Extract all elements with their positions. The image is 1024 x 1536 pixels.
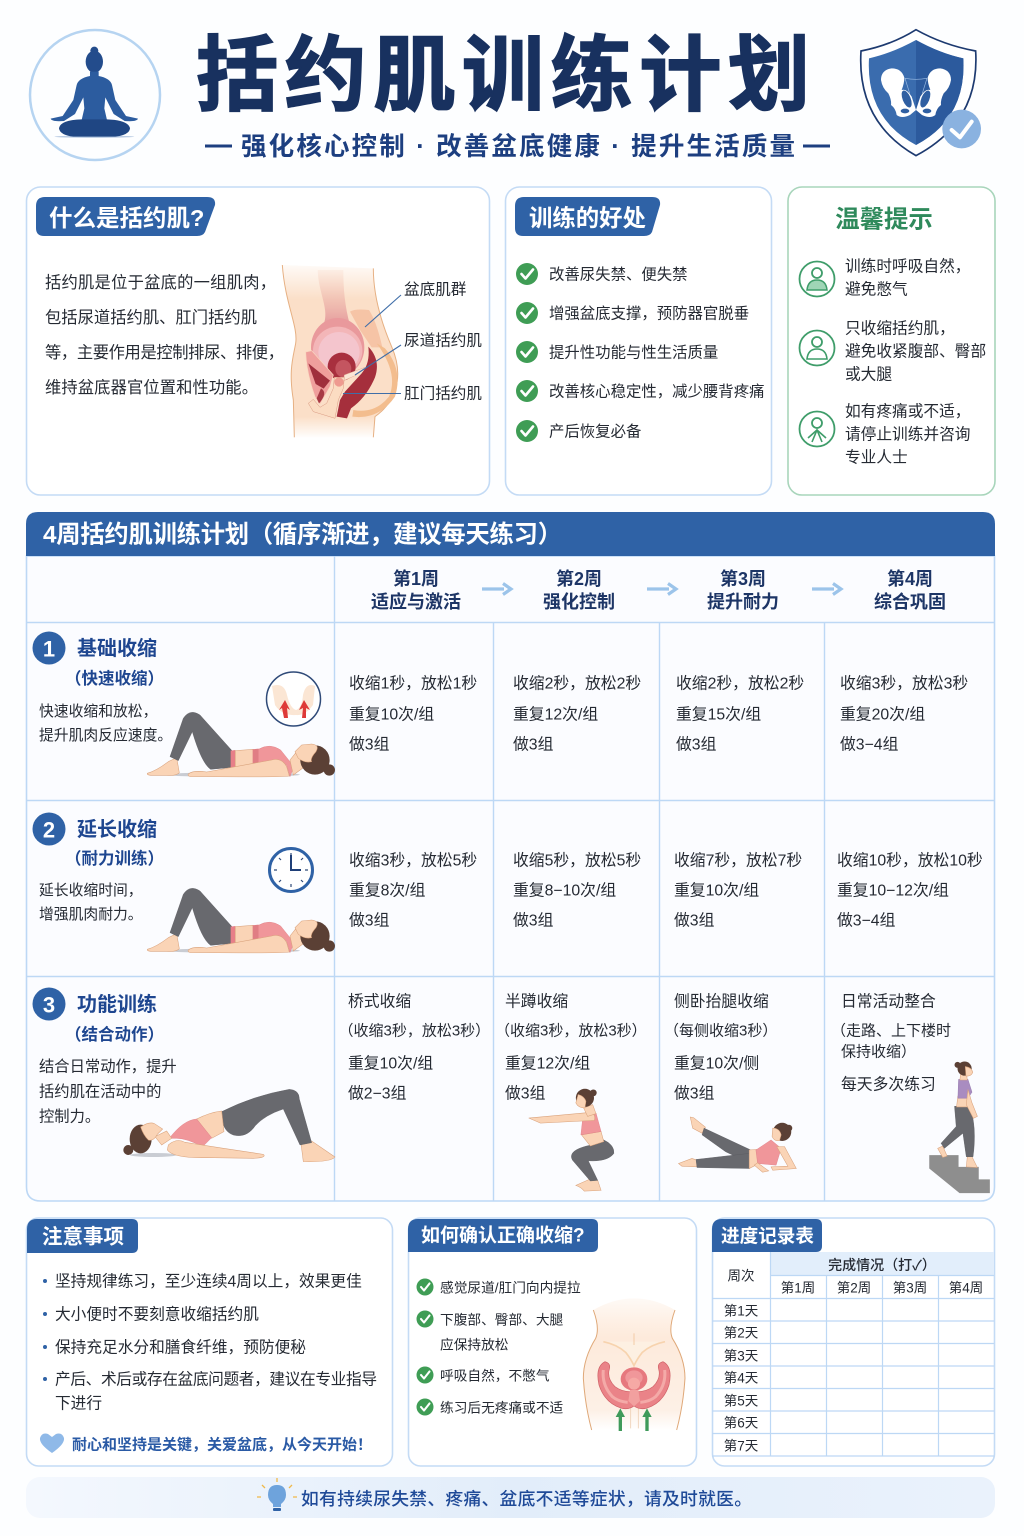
row 2 week 1: 做3组 bbox=[349, 912, 390, 930]
icon: meditation figure in circle bbox=[30, 30, 160, 160]
table headers: 第2周 bbox=[837, 1280, 871, 1296]
row 1 week 1: 重复10次/组 bbox=[349, 706, 434, 724]
table day labels: 第2天 bbox=[724, 1324, 759, 1340]
row 2 week 4: 做3−4组 bbox=[837, 912, 896, 930]
title: 括约肌训练计划 bbox=[196, 30, 810, 122]
table day labels: 第1天 bbox=[724, 1302, 759, 1318]
row 1 week 4: 重复20次/组 bbox=[840, 706, 925, 724]
panel: benefits of training bbox=[506, 187, 772, 495]
heading: benefits: 训练的好处 bbox=[529, 205, 646, 231]
row 2: extended contraction label: 增强肌肉耐力。 bbox=[39, 906, 143, 923]
tip: breathe naturally: 训练时呼吸自然， bbox=[845, 258, 970, 276]
tip: breathe naturally bbox=[800, 258, 970, 298]
heading: 4-week plan banner: 4周括约肌训练计划（循序渐进，建议每天练习） bbox=[43, 522, 562, 548]
table day labels: 第3天 bbox=[724, 1348, 759, 1364]
panel: 4-week training plan bbox=[26, 512, 995, 1201]
row 3 week 3: 侧卧抬腿收缩 bbox=[674, 992, 769, 1010]
row 3 week 4 bbox=[831, 992, 951, 1094]
row 3 week 3: 重复10次/侧 bbox=[674, 1054, 759, 1072]
text block: definition: 等，主要作用是控制排尿、排便， bbox=[45, 344, 284, 362]
row 3 week 3: 做3组 bbox=[674, 1084, 715, 1102]
row 2 week 3: 做3组 bbox=[674, 912, 715, 930]
label: anal sphincter bbox=[343, 384, 482, 402]
tip: stop when in pain: 专业人士 bbox=[845, 448, 908, 466]
table day labels bbox=[724, 1302, 759, 1454]
row 3 week 1: 做2−3组 bbox=[348, 1084, 407, 1102]
icon: light bulb bbox=[257, 1478, 297, 1511]
illustration: half squat bbox=[529, 1089, 614, 1191]
column header: week 2: 第2周 bbox=[556, 568, 602, 589]
row 3 week 1: 桥式收缩 bbox=[348, 992, 411, 1010]
column header: week 3: 提升耐力 bbox=[707, 591, 779, 612]
row 2 week 1: 收缩3秒，放松5秒 bbox=[349, 852, 477, 870]
row 3 week 1: （收缩3秒，放松3秒） bbox=[338, 1022, 490, 1040]
precaution list: 产后、术后或存在盆底问题者，建议在专业指导 bbox=[55, 1370, 377, 1388]
arrow: week 3 to 4 bbox=[812, 584, 841, 594]
checklist: 练习后无疼痛或不适 bbox=[440, 1400, 564, 1416]
row 1 week 4: 做3−4组 bbox=[840, 736, 899, 754]
row 3 week 4: 保持收缩） bbox=[841, 1044, 916, 1060]
checklist: 呼吸自然，不憋气 bbox=[440, 1368, 550, 1384]
column header: week 1: 第1周 bbox=[393, 568, 439, 589]
footer banner: seek medical advice: 如有持续尿失禁、疼痛、盆底不适等症状，请及时就医。 bbox=[301, 1489, 752, 1509]
tip: breathe naturally: 避免憋气 bbox=[845, 280, 908, 298]
row 1 week 4 bbox=[840, 674, 968, 754]
table headers: 周次 bbox=[728, 1268, 754, 1284]
column header: week 4 bbox=[874, 568, 946, 612]
row 3: functional training label: 结合日常动作，提升 bbox=[39, 1058, 177, 1076]
row 2: extended contraction label: 延长收缩时间， bbox=[39, 882, 143, 899]
checklist: 应保持放松 bbox=[440, 1336, 509, 1352]
panel: what is the sphincter bbox=[26, 187, 490, 495]
row 3: functional training label: 功能训练 bbox=[77, 992, 157, 1016]
row 3 week 2: 做3组 bbox=[505, 1084, 546, 1102]
row 2 week 2 bbox=[513, 852, 641, 930]
row 1 week 3: 做3组 bbox=[676, 736, 717, 754]
column header: week 4: 综合巩固 bbox=[874, 591, 946, 612]
row 2 week 2: 收缩5秒，放松5秒 bbox=[513, 852, 641, 870]
text block: definition: 包括尿道括约肌、肛门括约肌 bbox=[45, 309, 257, 327]
heading: how to confirm bbox=[408, 1219, 598, 1252]
benefit list: 改善核心稳定性，减少腰背疼痛 bbox=[549, 382, 764, 400]
tip: only contract sphincter: 或大腿 bbox=[845, 366, 892, 384]
callout: patience message with heart: 耐心和坚持是关键，关爱盆底，从今天开始！ bbox=[72, 1436, 372, 1454]
tip: stop when in pain: 请停止训练并咨询 bbox=[845, 426, 970, 444]
row 1: basic contraction label: 快速收缩和放松， bbox=[39, 703, 157, 720]
tip: only contract sphincter: 只收缩括约肌， bbox=[845, 320, 955, 338]
tip: only contract sphincter: 避免收紧腹部、臀部 bbox=[845, 342, 986, 360]
icon: pelvis shield with check bbox=[861, 30, 981, 156]
benefit list: 增强盆底支撑，预防器官脱垂 bbox=[549, 304, 749, 322]
heading: precautions: 注意事项 bbox=[42, 1224, 124, 1248]
column header: week 2: 强化控制 bbox=[543, 591, 615, 612]
row 3 week 3: （每侧收缩3秒） bbox=[664, 1022, 777, 1040]
row 1 week 3 bbox=[676, 674, 804, 754]
heading: warm tips: 温馨提示 bbox=[835, 206, 933, 234]
row 1 week 3: 收缩2秒，放松2秒 bbox=[676, 674, 804, 692]
row 3: functional training label: 3 bbox=[43, 992, 55, 1018]
precaution list: 坚持规律练习，至少连续4周以上，效果更佳 bbox=[55, 1272, 362, 1290]
footer banner: seek medical advice bbox=[26, 1477, 995, 1518]
row 1 week 3: 重复15次/组 bbox=[676, 706, 761, 724]
row 2 week 3: 收缩7秒，放松7秒 bbox=[674, 852, 802, 870]
illustration: lying pose row 1 bbox=[147, 712, 335, 777]
row 3 week 2 bbox=[495, 992, 647, 1102]
row 3 week 4: （走路、上下楼时 bbox=[831, 1022, 951, 1040]
row 2 week 1 bbox=[349, 852, 477, 930]
table headers: 第4周 bbox=[949, 1280, 983, 1296]
label: anal sphincter: 肛门括约肌 bbox=[404, 384, 482, 402]
checklist: 下腹部、臀部、大腿 bbox=[440, 1312, 564, 1328]
header bbox=[30, 30, 981, 161]
column header: week 1: 适应与激活 bbox=[371, 591, 461, 612]
row 1 week 2: 重复12次/组 bbox=[513, 706, 598, 724]
row 1: basic contraction label: 1 bbox=[43, 636, 55, 662]
row 2 week 4 bbox=[837, 852, 983, 930]
row 1: basic contraction label: （快速收缩） bbox=[65, 668, 164, 688]
illustration: side leg lift bbox=[678, 1117, 796, 1172]
precaution list bbox=[43, 1272, 377, 1412]
panel: precautions bbox=[26, 1218, 392, 1466]
text block: definition bbox=[45, 274, 284, 397]
heading: progress table bbox=[712, 1219, 822, 1252]
row 2 week 4: 重复10−12次/组 bbox=[837, 882, 949, 900]
row 1 week 1: 收缩1秒，放松1秒 bbox=[349, 674, 477, 692]
subtitle: 强化核心控制 · 改善盆底健康 · 提升生活质量 bbox=[241, 133, 795, 161]
row 3 week 1 bbox=[338, 992, 490, 1102]
illustration: front view pelvic floor with up arrows bbox=[583, 1298, 685, 1431]
column header: week 4: 第4周 bbox=[887, 568, 933, 589]
checklist: 感觉尿道/肛门向内提拉 bbox=[440, 1280, 581, 1296]
benefit list: 改善尿失禁、便失禁 bbox=[549, 266, 688, 284]
table day labels: 第7天 bbox=[724, 1438, 759, 1454]
row 3 week 4: 日常活动整合 bbox=[841, 992, 936, 1010]
row 3 week 4: 每天多次练习 bbox=[841, 1076, 936, 1094]
row 2 week 1: 重复8次/组 bbox=[349, 882, 426, 900]
tip: stop when in pain: 如有疼痛或不适， bbox=[845, 402, 970, 420]
table day labels: 第4天 bbox=[724, 1370, 759, 1386]
table headers: 第3周 bbox=[893, 1280, 927, 1296]
heading: benefits bbox=[515, 197, 660, 236]
table headers: 第1周 bbox=[781, 1280, 815, 1296]
icon: pelvic contraction inset bbox=[266, 672, 320, 726]
row 3: functional training label: （结合动作） bbox=[65, 1024, 164, 1044]
row 3 week 2: 半蹲收缩 bbox=[505, 992, 568, 1010]
panel: warm tips bbox=[788, 187, 995, 495]
row 3 week 1: 重复10次/组 bbox=[348, 1054, 433, 1072]
row 1 week 2 bbox=[513, 674, 641, 754]
arrow: week 2 to 3 bbox=[647, 584, 676, 594]
row 3: functional training label: 控制力。 bbox=[39, 1108, 100, 1126]
illustration: bridge pose bbox=[123, 1089, 335, 1162]
benefit list bbox=[516, 263, 764, 442]
label: pelvic floor muscles bbox=[365, 280, 467, 327]
heading: what is the sphincter bbox=[36, 197, 215, 236]
heading: precautions bbox=[27, 1219, 138, 1253]
text block: definition: 括约肌是位于盆底的一组肌肉， bbox=[45, 274, 276, 292]
table day labels: 第6天 bbox=[724, 1414, 759, 1430]
row 1 week 2: 做3组 bbox=[513, 736, 554, 754]
table headers bbox=[728, 1257, 983, 1296]
precaution list: 保持充足水分和膳食纤维，预防便秘 bbox=[55, 1338, 306, 1356]
column header: week 1 bbox=[371, 568, 461, 612]
heading: how to confirm: 如何确认正确收缩? bbox=[421, 1224, 585, 1246]
row 3: functional training label bbox=[32, 988, 177, 1126]
label: urethral sphincter bbox=[355, 332, 482, 375]
heading: what is the sphincter: 什么是括约肌? bbox=[49, 205, 204, 231]
row 1 week 1 bbox=[349, 674, 477, 754]
illustration: walking upstairs bbox=[929, 1062, 990, 1193]
tip: stop when in pain bbox=[800, 402, 970, 466]
row 2 week 3: 重复10次/组 bbox=[674, 882, 759, 900]
row 2 week 2: 重复8−10次/组 bbox=[513, 882, 616, 900]
tip: only contract sphincter bbox=[800, 320, 986, 384]
row 1 week 2: 收缩2秒，放松2秒 bbox=[513, 674, 641, 692]
arrow: week 1 to 2 bbox=[482, 584, 511, 594]
label: urethral sphincter: 尿道括约肌 bbox=[404, 332, 482, 350]
text block: definition: 维持盆底器官位置和性功能。 bbox=[45, 379, 258, 397]
row 2 week 4: 收缩10秒，放松10秒 bbox=[837, 852, 983, 870]
heading: progress table: 进度记录表 bbox=[721, 1226, 814, 1246]
panel: progress tracking table bbox=[712, 1218, 994, 1466]
column header: week 2 bbox=[543, 568, 615, 612]
row 1: basic contraction label: 基础收缩 bbox=[77, 636, 157, 660]
row 1 week 4: 收缩3秒，放松3秒 bbox=[840, 674, 968, 692]
label: pelvic floor muscles: 盆底肌群 bbox=[404, 280, 467, 298]
row 1: basic contraction label: 提升肌肉反应速度。 bbox=[39, 726, 172, 744]
table headers: 完成情况（打✓） bbox=[828, 1257, 936, 1273]
benefit list: 产后恢复必备 bbox=[549, 422, 641, 440]
row 2: extended contraction label: 延长收缩 bbox=[77, 817, 157, 841]
row 2: extended contraction label: （耐力训练） bbox=[65, 848, 164, 868]
column header: week 3: 第3周 bbox=[720, 568, 766, 589]
anatomy illustration: side view of pelvis bbox=[282, 265, 398, 437]
precaution list: 下进行 bbox=[55, 1394, 102, 1412]
row 3 week 2: 重复12次/组 bbox=[505, 1054, 590, 1072]
row 2: extended contraction label bbox=[32, 812, 164, 923]
table day labels: 第5天 bbox=[724, 1392, 759, 1408]
row 1 week 1: 做3组 bbox=[349, 736, 390, 754]
benefit list: 提升性功能与性生活质量 bbox=[549, 344, 718, 362]
row 3: functional training label: 括约肌在活动中的 bbox=[39, 1084, 161, 1100]
column header: week 3 bbox=[707, 568, 779, 612]
precaution list: 大小便时不要刻意收缩括约肌 bbox=[55, 1304, 259, 1324]
heading: 4-week plan banner bbox=[26, 512, 995, 556]
row 3 week 3 bbox=[664, 992, 777, 1102]
row 1: basic contraction label bbox=[32, 632, 172, 744]
row 3 week 2: （收缩3秒，放松3秒） bbox=[495, 1022, 647, 1040]
row 2: extended contraction label: 2 bbox=[43, 818, 55, 842]
illustration: lying pose row 2 bbox=[147, 888, 335, 953]
row 2 week 2: 做3组 bbox=[513, 912, 554, 930]
checklist bbox=[416, 1278, 581, 1416]
icon: clock bbox=[270, 848, 312, 892]
row 2 week 3 bbox=[674, 852, 802, 930]
panel: how to confirm correct contraction bbox=[408, 1218, 696, 1466]
